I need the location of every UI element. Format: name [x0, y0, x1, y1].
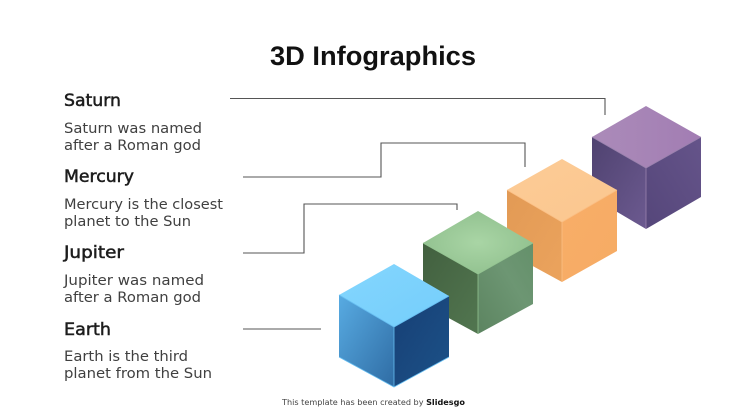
- cube: orange (Mercury): [507, 159, 617, 282]
- heading: Jupiter: Jupiter: [63, 243, 124, 262]
- text block: Saturn: [64, 91, 202, 154]
- connector: Mercury: [243, 143, 525, 177]
- description: Jupiter: after a Roman god: [64, 290, 201, 306]
- description: Mercury: planet to the Sun: [64, 214, 191, 230]
- heading: Earth: Earth: [64, 320, 111, 339]
- description: Saturn: Saturn was named: [64, 121, 202, 137]
- text block: Mercury: [64, 167, 223, 230]
- description: Earth: planet from the Sun: [64, 366, 212, 382]
- connector: Jupiter: [243, 204, 457, 253]
- description: Earth: Earth is the third: [64, 349, 188, 365]
- description: Jupiter: [63, 273, 204, 306]
- heading: Saturn: Saturn: [64, 91, 121, 110]
- cube: green (Jupiter): [423, 211, 533, 334]
- heading: Mercury: Mercury: [64, 167, 134, 186]
- description: Mercury: Mercury is the closest: [64, 197, 223, 213]
- description: Jupiter: Jupiter was named: [63, 273, 204, 289]
- description: Mercury: [64, 197, 223, 230]
- cube: purple (Saturn): [592, 106, 701, 229]
- title: 3D Infographics: [270, 41, 476, 71]
- description: Earth: [64, 349, 212, 382]
- text block: Earth: [64, 320, 212, 382]
- description: Saturn: [64, 121, 202, 154]
- connector: Earth: [243, 328, 321, 330]
- cube: blue (Earth): [339, 264, 449, 387]
- description: Saturn: after a Roman god: [64, 138, 201, 154]
- text block: Jupiter: [63, 243, 204, 306]
- footer credit: This template has been created by Slidesgo: [281, 398, 465, 407]
- connector: Saturn: [230, 98, 605, 115]
